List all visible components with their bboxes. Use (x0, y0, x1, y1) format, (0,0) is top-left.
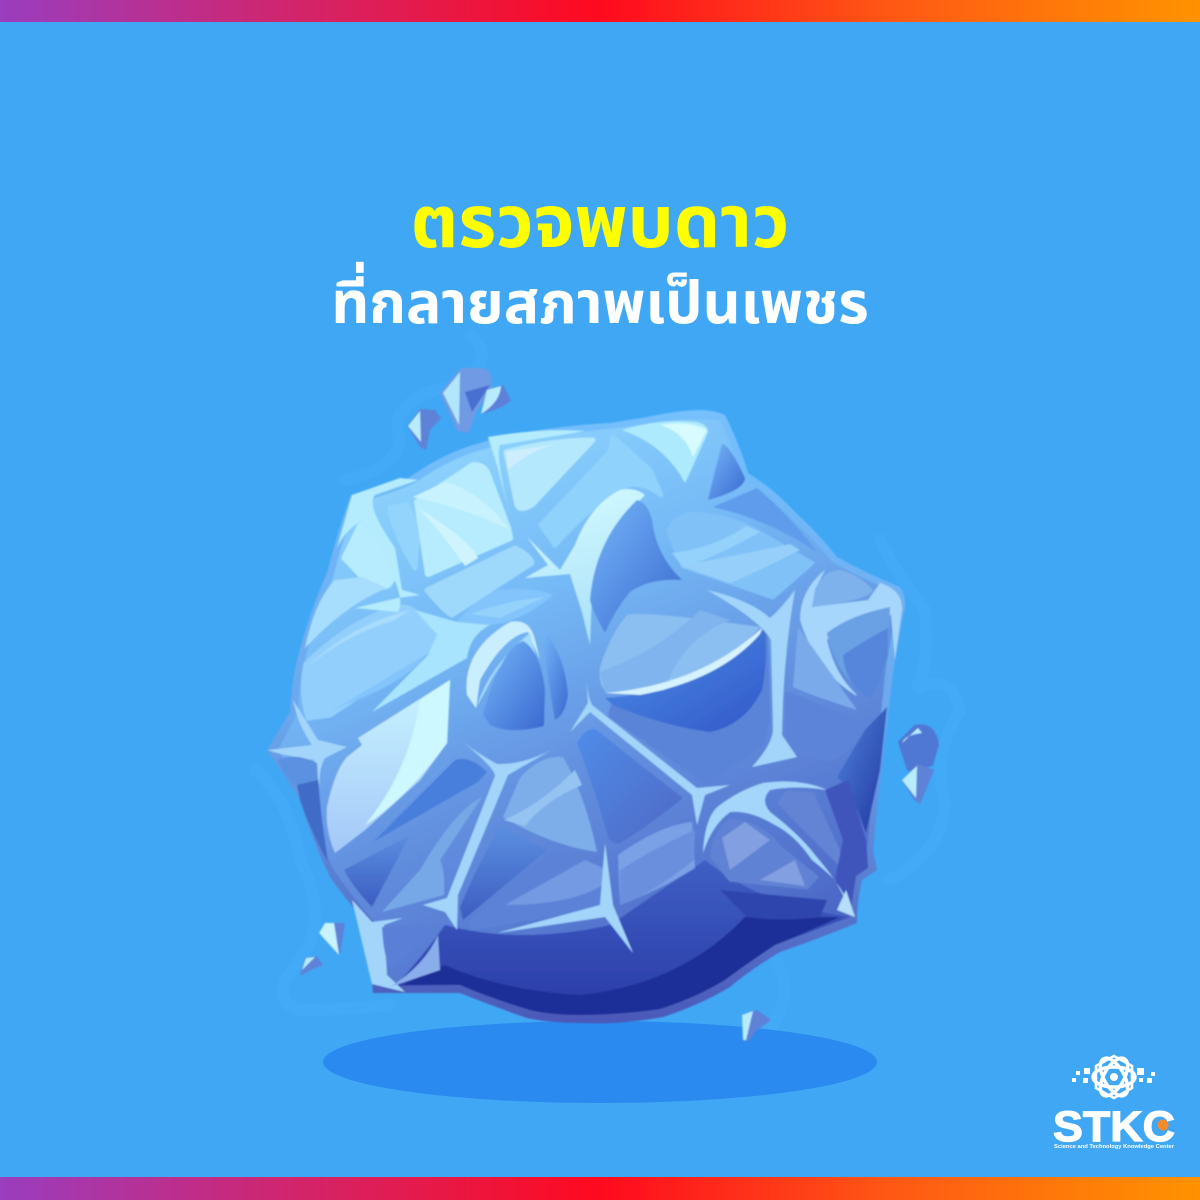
crystal top left (407, 409, 441, 450)
STKC logo (1053, 1054, 1175, 1151)
right side facets (787, 570, 902, 833)
logo orange dot (1158, 1120, 1168, 1130)
crystal top small right (481, 385, 511, 414)
planet inner body (278, 419, 897, 1015)
crystal bottom right (742, 1010, 771, 1042)
top-right facets (622, 421, 818, 598)
left spike facet (278, 757, 318, 787)
logo pixels (1072, 1068, 1155, 1083)
crystal bottom left 1 (319, 923, 345, 955)
title line 1: yellow: ตรวจพบดาว (411, 182, 789, 263)
central dark facet (577, 729, 683, 843)
lower dark hemisphere (395, 860, 850, 1015)
logo atom icon (1093, 1054, 1135, 1100)
small lower-left facet (382, 925, 427, 967)
central crystal facet (590, 500, 682, 633)
ground shadow (323, 1021, 877, 1103)
planet outer silhouette (267, 410, 905, 1023)
left lower facets (344, 757, 603, 930)
lower band facets (618, 822, 695, 905)
crystal right small (902, 764, 934, 804)
bright crack lines upper (337, 430, 645, 712)
lower-right cluster (703, 780, 868, 920)
bottom gradient bar (0, 1177, 1200, 1200)
diamond planet (267, 369, 938, 1042)
left bright shard (327, 680, 450, 853)
central small crystal (467, 621, 568, 730)
logo tagline: Science and Technology Knowledge Center (1054, 1144, 1175, 1150)
big lens facet (600, 610, 768, 782)
smoke swirls behind the gem (255, 335, 960, 1040)
left edge shadow (297, 780, 328, 862)
crystal top large (441, 369, 491, 432)
bright crack network (268, 590, 797, 992)
top gradient bar (0, 0, 1200, 22)
small crystals (300, 369, 938, 1042)
crystal bottom left 2 (300, 956, 323, 976)
top-left light facets (303, 437, 661, 718)
crystal right large (899, 725, 938, 770)
logo wordmark: STKC (1053, 1103, 1175, 1151)
title line 2: white: ที่กลายสภาพเป็นเพชร (331, 261, 869, 336)
